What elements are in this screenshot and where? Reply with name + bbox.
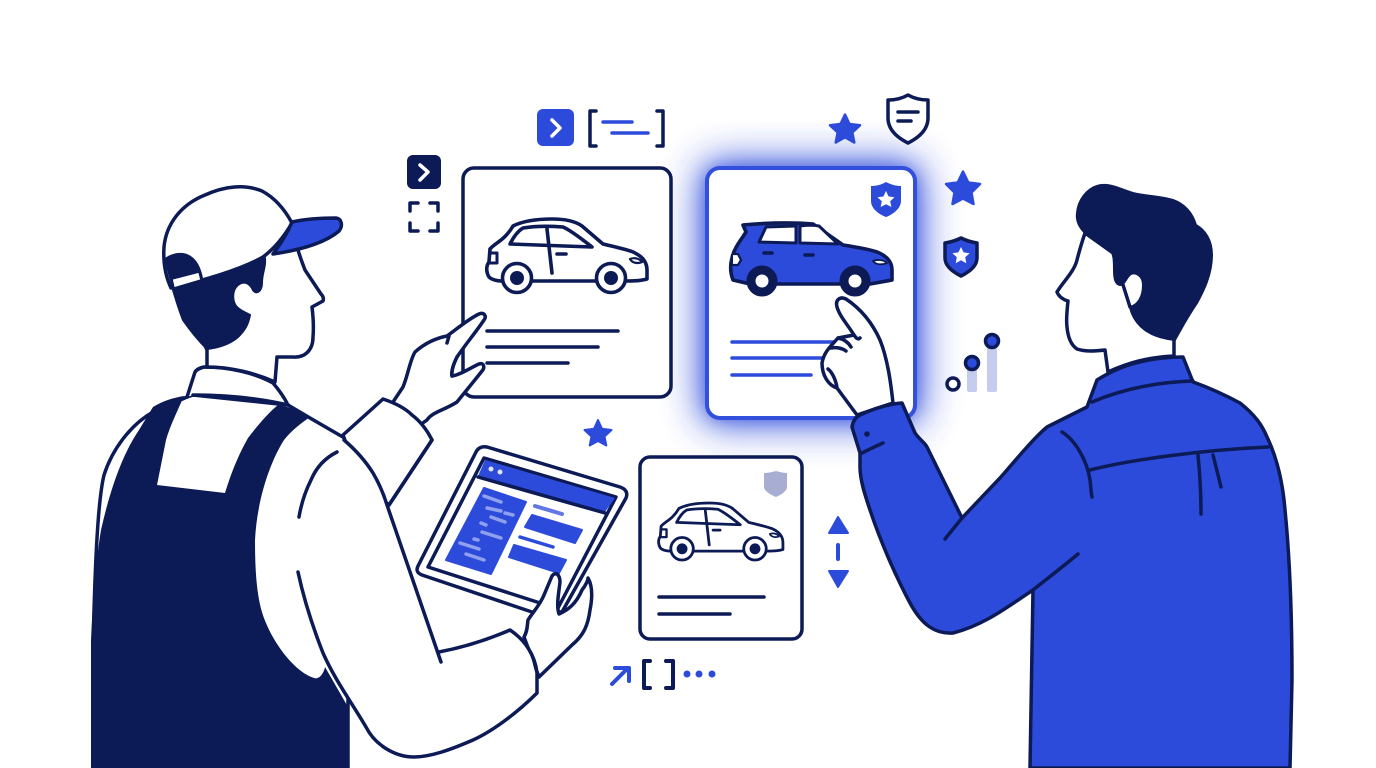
icon: focus frame [410, 203, 438, 231]
pointing hand [822, 298, 893, 415]
icon: bracket with lines [590, 111, 663, 146]
shirt back [93, 395, 348, 768]
sleeve seam [1062, 432, 1092, 497]
pleats [1198, 455, 1221, 514]
overalls [91, 396, 348, 768]
figure: mechanic on the left [91, 187, 627, 768]
icon: navy chevron square [407, 155, 441, 189]
chart: rising dots [947, 334, 998, 392]
icon: shield badge [871, 182, 901, 217]
panel: lower car card [640, 457, 802, 639]
icon: three dots [684, 670, 716, 678]
text lines [732, 342, 840, 375]
jacket collar seam [1092, 381, 1193, 402]
icon: square brackets [644, 661, 673, 688]
upper sleeve [343, 399, 432, 505]
icon: diagonal arrow [612, 668, 629, 684]
tablet side panel [446, 488, 526, 574]
icon: shield with star [945, 238, 977, 276]
tablet content blocks [535, 506, 562, 514]
arm crease [945, 518, 962, 539]
lower hand [524, 574, 592, 677]
icon: star near tablet [584, 420, 612, 446]
figure: customer on the right [822, 185, 1292, 768]
panel: card glow [701, 162, 921, 424]
neck and face [1057, 233, 1174, 372]
sleeve fold [299, 452, 337, 517]
hair [173, 258, 265, 349]
neck and face [180, 240, 323, 382]
panel: highlighted car card [707, 168, 915, 418]
icon: outlined shield [888, 95, 928, 143]
tablet [417, 447, 627, 612]
panel: plain car card [463, 168, 671, 397]
icon: up down arrows [829, 517, 848, 587]
forearm [298, 440, 537, 757]
cap strap [165, 253, 203, 287]
cuff details [862, 443, 883, 453]
collar [187, 367, 288, 405]
text lines [659, 597, 764, 614]
icon: blue chevron square [537, 109, 574, 146]
icon: car outline small [659, 503, 783, 560]
text lines [487, 331, 618, 363]
icon: star top [830, 114, 860, 142]
icon: car outline [487, 219, 647, 292]
raised hand [393, 313, 485, 432]
jacket yoke [1090, 447, 1268, 470]
icon: muted shield [764, 471, 787, 497]
hair [1077, 185, 1212, 340]
icon: large star [946, 172, 980, 204]
tablet header [478, 460, 615, 512]
cap dome [164, 187, 292, 288]
icon: blue car [731, 223, 892, 292]
jacket [852, 357, 1292, 768]
cap brim [273, 218, 341, 254]
